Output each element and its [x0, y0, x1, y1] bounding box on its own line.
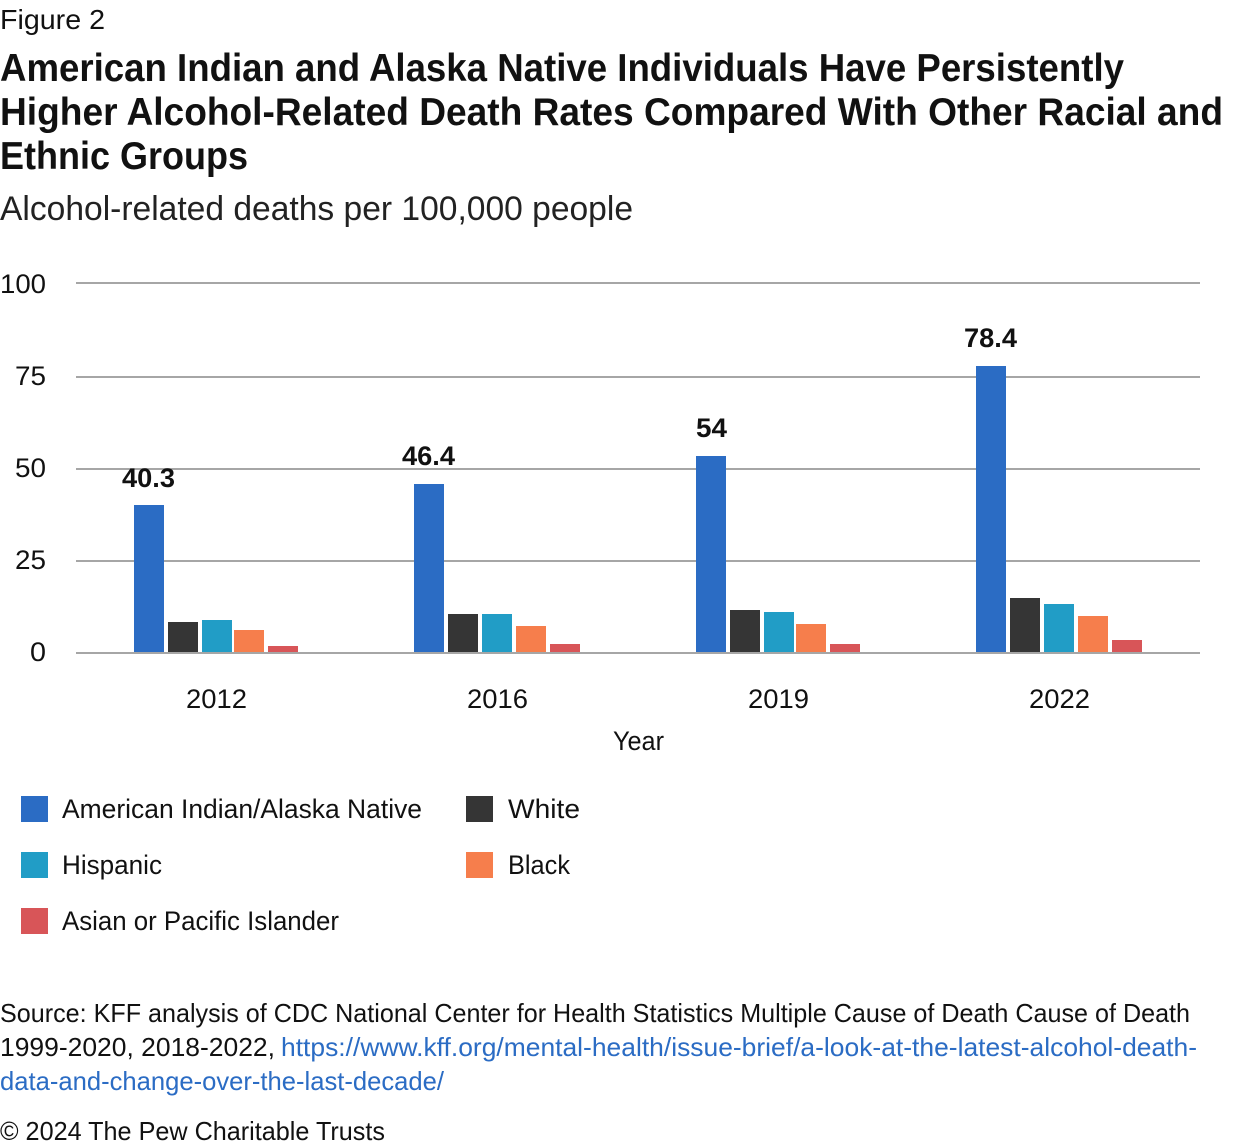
source note: 1999-2020, 2018-2022,: [0, 1032, 275, 1062]
legend: White: [508, 794, 580, 824]
x axis labels: [186, 684, 1090, 714]
value labels: 46.4: [402, 441, 455, 471]
legend: Hispanic: [62, 850, 162, 880]
figure label: Figure 2: [0, 4, 105, 35]
source note: [0, 998, 1197, 1096]
source note: https://www.kff.org/mental-health/issue-brief/a-look-at-the-latest-alcohol-death-: [281, 1032, 1197, 1062]
value labels: 54: [696, 413, 727, 443]
copyright: © 2024 The Pew Charitable Trusts: [0, 1116, 385, 1146]
bars: 2019: [696, 456, 860, 652]
x axis labels: 2022: [1029, 684, 1090, 714]
legend: American Indian/Alaska Native: [62, 794, 422, 824]
y axis labels: [0, 269, 46, 667]
legend: [21, 794, 580, 936]
bars: 2022: [976, 366, 1142, 652]
x axis labels: 2012: [186, 684, 247, 714]
x axis labels: 2019: [748, 684, 809, 714]
value labels: [122, 323, 1017, 493]
title: [0, 47, 1223, 178]
value labels: 40.3: [122, 463, 175, 493]
source note: Source: KFF analysis of CDC National Center for Health Statistics Multiple Cause of Death Cause of Death: [0, 998, 1190, 1028]
x axis title: Year: [613, 726, 664, 756]
title: Ethnic Groups: [0, 135, 248, 178]
y axis labels: 0: [30, 637, 46, 667]
bars: 2012: [134, 505, 298, 652]
subtitle: Alcohol-related deaths per 100,000 people: [0, 190, 633, 228]
y axis labels: 75: [15, 361, 46, 391]
y axis labels: 50: [15, 453, 46, 483]
legend: Asian or Pacific Islander: [62, 906, 339, 936]
legend: Black: [508, 850, 570, 880]
bar chart: [0, 269, 1200, 756]
value labels: 78.4: [964, 323, 1017, 353]
x axis labels: 2016: [467, 684, 528, 714]
y axis labels: 25: [15, 545, 46, 575]
bars: 2016: [414, 484, 580, 652]
title: American Indian and Alaska Native Individuals Have Persistently: [0, 47, 1124, 90]
source note: data-and-change-over-the-last-decade/: [0, 1066, 445, 1096]
y axis labels: 100: [0, 269, 46, 299]
